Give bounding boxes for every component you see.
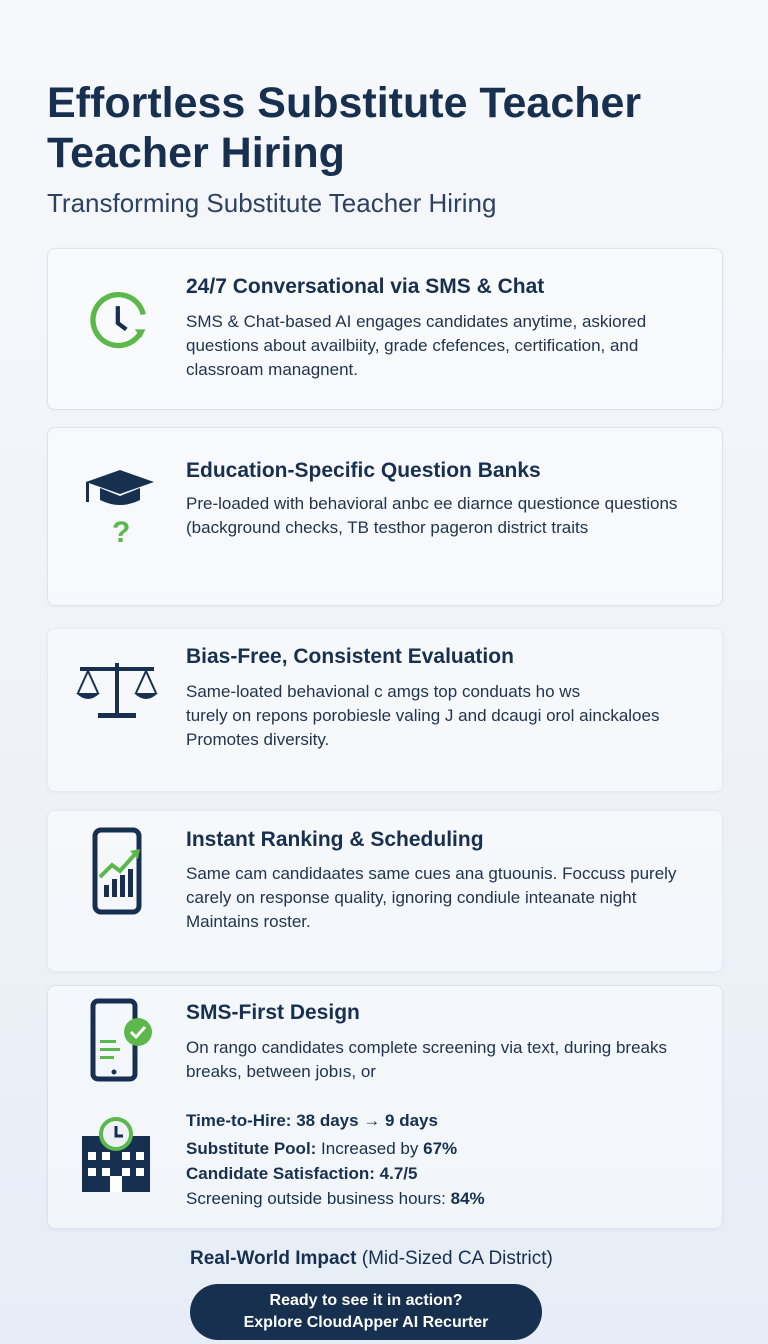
panel: ranking xyxy=(47,810,723,972)
CTA button: Ready to see it in action? xyxy=(270,1292,462,1309)
text 1: SMS & Chat-based AI engages candidates anytime, askiored xyxy=(186,312,646,331)
text 1: questions about availbiity, grade cfefences, certification, and xyxy=(186,336,638,355)
stats: Screening outside business hours: 84% xyxy=(186,1189,485,1208)
subtitle: Transforming Substitute Teacher Hiring xyxy=(47,188,496,218)
text 1 xyxy=(186,312,646,379)
impact label: Real-World Impact (Mid-Sized CA District) xyxy=(190,1248,553,1269)
CTA button: Explore CloudApper AI Recurter xyxy=(244,1314,488,1331)
CTA button xyxy=(190,1284,542,1340)
heading 4: Instant Ranking & Scheduling xyxy=(186,828,484,851)
heading 5: SMS-First Design xyxy=(186,1001,360,1024)
stats xyxy=(186,1111,485,1208)
icon: scales xyxy=(76,663,158,718)
text 3: Promotes diversity. xyxy=(186,730,329,749)
title: Effortless Substitute Teacher xyxy=(47,79,641,127)
icon: phone check xyxy=(90,998,152,1082)
icon: building clock xyxy=(82,1117,150,1192)
text 5: breaks, between jobıs, or xyxy=(186,1062,376,1081)
text 2 xyxy=(186,494,677,537)
icon: clock xyxy=(90,292,146,348)
stats: Candidate Satisfaction: 4.7/5 xyxy=(186,1164,417,1183)
panel: conversational xyxy=(47,248,723,410)
text 3 xyxy=(186,682,659,749)
panel: SMS-first + impact xyxy=(47,985,723,1229)
title xyxy=(47,79,641,177)
text 5 xyxy=(186,1038,667,1081)
heading 1: 24/7 Conversational via SMS & Chat xyxy=(186,275,544,298)
heading 3: Bias-Free, Consistent Evaluation xyxy=(186,645,514,668)
text 2: Pre-loaded with behavioral anbc ee diarnce questionce questions xyxy=(186,494,677,513)
text 1: classroam managnent. xyxy=(186,360,358,379)
icon: graduation cap xyxy=(86,470,154,546)
stats: Substitute Pool: Increased by 67% xyxy=(186,1139,457,1158)
stats: Time-to-Hire: 38 days → 9 days xyxy=(186,1111,438,1130)
text 3: Same-loated behavional c amgs top conduats ho ws xyxy=(186,682,580,701)
text 4 xyxy=(186,864,676,931)
text 4: Same cam candidaates same cues ana gtuounis. Foccuss purely xyxy=(186,864,676,883)
text 3: turely on repons porobiesle valing J and dcaugi orol ainckaloes xyxy=(186,706,659,725)
title: Teacher Hiring xyxy=(47,129,345,177)
text 4: Maintains roster. xyxy=(186,912,311,931)
panel: question banks xyxy=(47,427,723,606)
icon: phone chart xyxy=(92,828,142,914)
heading 2: Education-Specific Question Banks xyxy=(186,459,541,482)
text 2: (background checks, TB testhor pageron district traits xyxy=(186,518,588,537)
panel: bias-free xyxy=(47,628,723,792)
text 5: On rango candidates complete screening via text, during breaks xyxy=(186,1038,667,1057)
text 4: carely on response quality, ignoring condiule inteanate night xyxy=(186,888,636,907)
